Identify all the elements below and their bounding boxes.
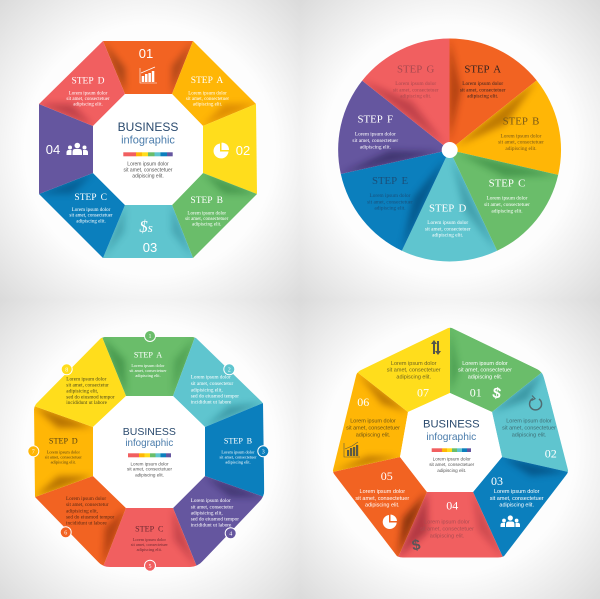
step A text: Lorem ipsum dolor (462, 81, 503, 87)
step C text: Lorem ipsum dolor (133, 537, 166, 542)
step F label: STEP F (358, 114, 393, 126)
slice: step C (450, 150, 558, 251)
icon: people (66, 143, 88, 155)
number 03: 03 (143, 240, 157, 255)
badge 4: 4 (229, 531, 232, 537)
step F text: adipiscing elit. (360, 144, 391, 150)
badge 1: 1 (148, 334, 152, 340)
text block 4: Lorem ipsum dolor (191, 498, 231, 504)
slice: step G (362, 38, 450, 150)
slice: step F (338, 81, 450, 174)
text 01: adipiscing elit. (468, 375, 503, 381)
number 02: 02 (236, 143, 250, 158)
step F text: sit amet, consectetuer (352, 138, 398, 144)
text 01: sit amet, consectetuer (458, 368, 512, 374)
step B text: Lorem ipsum dolor (187, 211, 226, 216)
step B label: STEP B (503, 115, 539, 127)
step E label: STEP E (372, 175, 408, 187)
number 06: 06 (357, 395, 369, 409)
text 03: adipiscing elit. (499, 503, 534, 509)
title: BUSINESS (123, 426, 176, 438)
step B text: adipiscing elit. (505, 146, 537, 152)
number 05: 05 (381, 469, 393, 483)
badge 2: 2 (228, 367, 231, 373)
step D text: adipiscing elit. (51, 459, 76, 464)
segment: step D red (39, 41, 125, 126)
step D text: adipiscing elit. (432, 233, 463, 239)
step G text: adipiscing elit. (400, 94, 431, 100)
text 05: adipiscing elit. (365, 503, 400, 509)
text 06: adipiscing elit. (356, 432, 391, 438)
badge 3 (258, 446, 269, 457)
icon: people (500, 515, 520, 527)
step C text: sit amet, consectetuer (69, 214, 113, 219)
number 04: 04 (46, 142, 60, 157)
step C text: Lorem ipsum dolor (72, 208, 111, 213)
text 05: Lorem ipsum dolor (360, 489, 405, 495)
center text: sit amet, consectetuer (124, 168, 173, 174)
step G label: STEP G (397, 63, 435, 75)
panel: pie wheel with seven steps (338, 38, 561, 261)
segment: step B blue (205, 403, 264, 497)
text 02: adipiscing elit. (512, 432, 547, 438)
text 01: Lorem ipsum dolor (462, 361, 508, 367)
step C text: adipiscing elit. (491, 208, 523, 214)
center text: Lorem ipsum dolor (433, 456, 471, 461)
center text: adipiscing elit. (132, 174, 164, 180)
step C text: adipiscing elit. (76, 219, 106, 224)
step D text: Lorem ipsum dolor (47, 449, 80, 454)
segment: step A amber (172, 41, 256, 126)
step D text: sit amet, consectetuer (66, 97, 110, 102)
text 02: sit amet, consectetuer (502, 425, 556, 431)
text 07: Lorem ipsum dolor (391, 361, 437, 367)
icon: bar chart (344, 442, 360, 457)
slice: step B (450, 80, 561, 175)
icon: pie chart (214, 143, 229, 158)
segment: 01 orange (103, 41, 193, 94)
center text: sit amet, consectetuer (127, 467, 172, 472)
text block 8: incididunt ut labore (66, 400, 108, 406)
segment: 01 green (450, 327, 543, 412)
title: BUSINESS (118, 120, 178, 134)
text 04: adipiscing elit. (430, 533, 465, 539)
text 05: sit amet, consectetuer (355, 496, 409, 502)
step A text: adipiscing elit. (135, 373, 161, 378)
segment: 02 yellow (203, 104, 257, 194)
icon: bar chart (140, 67, 157, 83)
text block 8: sit amet, consectetur (66, 383, 109, 389)
text 06: sit amet, consectetuer (346, 425, 400, 431)
step A text: sit amet, consectetuer (460, 87, 506, 93)
slice: step E (341, 150, 450, 251)
segment: 8 yellow (34, 337, 126, 427)
text 06: Lorem ipsum dolor (350, 419, 396, 425)
number 01: 01 (470, 386, 482, 400)
text 04: Lorem ipsum dolor (424, 520, 470, 526)
step B text: adipiscing elit. (225, 459, 251, 464)
step C text: sit amet, consectetuer (484, 202, 530, 208)
step D text: adipiscing elit. (73, 103, 103, 108)
center hub (93, 396, 205, 508)
icon: dollar: $ (411, 536, 422, 555)
badge 7: 7 (32, 449, 35, 455)
text block 4: sed do eiusmod tempor (191, 517, 239, 523)
text block 8: adipisicing elit, (66, 389, 98, 395)
step A text: sit amet, consectetuer (186, 97, 229, 102)
segment: 4 purple (173, 476, 264, 567)
segment: 04 purple (39, 104, 93, 194)
step B text: adipiscing elit. (192, 223, 221, 228)
panel: heptagon with seven numbered segments (332, 327, 568, 558)
subtitle: infographic (426, 432, 476, 443)
step B text: sit amet, consectetuer (498, 140, 544, 146)
text block 4: sit amet, consectetur (191, 504, 233, 510)
badge 8: 8 (65, 367, 68, 373)
center text: adipiscing elit. (135, 472, 164, 477)
badge 4 (225, 528, 236, 539)
slice: step D (402, 150, 497, 261)
badge 5 (144, 560, 156, 571)
slice: step A (450, 38, 537, 150)
color bar (432, 448, 471, 452)
number 03: 03 (491, 474, 503, 488)
step D label: STEP D (49, 437, 78, 446)
step C label: STEP C (489, 178, 525, 190)
center text: adipiscing elit. (437, 468, 466, 473)
step A label: STEP A (191, 76, 223, 86)
icon: dollar sign: $s (139, 217, 153, 236)
step B text: Lorem ipsum dolor (501, 133, 542, 139)
icon: up down arrows (431, 340, 441, 355)
text block 6: incididunt ut labore (66, 520, 107, 526)
text 04: sit amet, consectetuer (420, 526, 474, 532)
text block 4: incididunt ut labore (191, 523, 232, 529)
text block 6: sed do eiusmod tempor (66, 514, 115, 520)
color bar (123, 152, 173, 156)
text block 2: adipisicing elit, (191, 387, 223, 393)
segment: step C blue (39, 173, 125, 258)
subtitle: infographic (121, 134, 175, 146)
badge 1 (144, 330, 156, 342)
center text: sit amet, consectetuer (429, 462, 475, 467)
step D text: sit amet, consectetuer (45, 454, 82, 460)
step G text: Lorem ipsum dolor (395, 81, 436, 87)
number 07: 07 (417, 386, 429, 400)
number 02: 02 (545, 446, 557, 460)
text 07: adipiscing elit. (396, 375, 431, 381)
text 03: Lorem ipsum dolor (494, 489, 540, 495)
step D text: Lorem ipsum dolor (69, 91, 108, 96)
text block 2: incididunt ut labore (191, 399, 232, 405)
number 01: 01 (139, 46, 153, 61)
step A label: STEP A (464, 63, 501, 75)
segment: 6 orange (35, 476, 126, 567)
step A text: Lorem ipsum dolor (131, 363, 165, 368)
text 07: sit amet, consectetuer (387, 368, 441, 374)
icon: pie chart (383, 514, 397, 529)
text block 2: sed do eiusmod tempor (191, 393, 239, 399)
step C label: STEP C (135, 524, 164, 533)
text block 6: adipisicing elit, (66, 508, 98, 514)
panel: rounded octagon with numbered badges (28, 330, 269, 571)
step F text: Lorem ipsum dolor (355, 132, 396, 138)
segment: step A green (102, 337, 195, 396)
segment: 2 teal (173, 337, 263, 427)
badge 7 (28, 446, 39, 457)
segment: 04 red (398, 492, 503, 558)
text block 6: sit amet, consectetur (66, 502, 109, 508)
text block 4: adipisicing elit, (191, 511, 223, 517)
segment: step B green (172, 173, 257, 258)
center text: Lorem ipsum dolor (130, 461, 169, 466)
segment: step D amber (34, 406, 93, 497)
step A text: sit amet, consectetuer (129, 368, 167, 374)
step D label: STEP D (429, 202, 467, 214)
segment: 03 blue (473, 457, 568, 558)
step C text: Lorem ipsum dolor (487, 196, 528, 202)
segment: 07 yellow (357, 327, 450, 412)
badge 3: 3 (262, 449, 265, 455)
text block 6: Lorem ipsum dolor (66, 496, 106, 502)
text block 2: Lorem ipsum dolor (191, 375, 231, 381)
center hub (400, 393, 502, 492)
icon: dollar: $ (491, 384, 503, 403)
segment: 03 teal (103, 205, 193, 258)
step A label: STEP A (134, 350, 162, 359)
badge 8 (61, 364, 72, 375)
badge 2 (224, 364, 235, 375)
step E text: sit amet, consectetuer (367, 199, 413, 205)
color bar (128, 453, 171, 457)
icon: refresh (530, 396, 542, 410)
segment: step C red (103, 508, 197, 567)
segment: 02 teal (492, 372, 568, 472)
segment: 06 amber (332, 372, 408, 472)
center text: Lorem ipsum dolor (127, 162, 169, 168)
text 03: sit amet, consectetuer (490, 496, 544, 502)
step B text: sit amet, consectetuer (185, 217, 229, 222)
badge 6: 6 (64, 530, 67, 536)
step A text: Lorem ipsum dolor (188, 91, 227, 96)
step D text: sit amet, consectetuer (425, 226, 471, 232)
title: BUSINESS (423, 419, 480, 431)
step C label: STEP C (74, 193, 107, 203)
step E text: Lorem ipsum dolor (370, 193, 411, 199)
text block 2: sit amet, consectetur (191, 381, 233, 387)
step A text: adipiscing elit. (467, 94, 498, 100)
step E text: adipiscing elit. (374, 206, 406, 212)
step D label: STEP D (71, 76, 105, 86)
panel: octagon with four steps and four numbers (39, 41, 257, 258)
subtitle: infographic (125, 438, 173, 449)
step C text: adipiscing elit. (137, 547, 162, 552)
step B text: Lorem ipsum dolor (221, 449, 255, 454)
step D text: Lorem ipsum dolor (427, 220, 468, 226)
step B label: STEP B (224, 437, 253, 446)
step B text: sit amet, consectetuer (219, 454, 257, 460)
center hole (442, 142, 458, 158)
step B label: STEP B (190, 196, 223, 206)
badge 5: 5 (148, 564, 152, 570)
step C text: sit amet, consectetuer (131, 542, 168, 548)
text 02: Lorem ipsum dolor (506, 419, 552, 425)
badge 6 (60, 527, 71, 538)
step A text: adipiscing elit. (193, 103, 222, 108)
text block 8: sed do eiusmod tempor (66, 394, 115, 400)
step G text: sit amet, consectetuer (393, 87, 439, 93)
text block 8: Lorem ipsum dolor (66, 377, 107, 383)
segment: 05 orange (332, 457, 427, 558)
number 04: 04 (446, 498, 458, 512)
center hub (93, 94, 203, 205)
